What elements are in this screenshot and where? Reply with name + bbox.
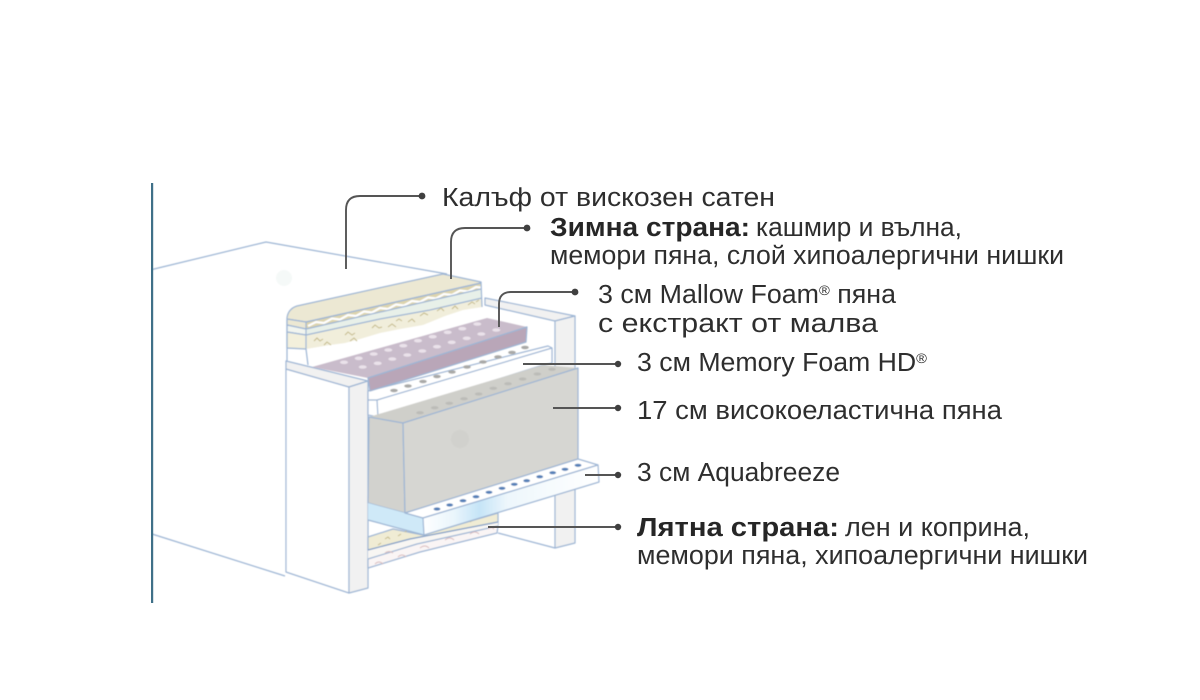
label: winter side: мемори пяна, слой хипоалергични нишки <box>550 242 1064 270</box>
mallow foam layer <box>312 318 527 391</box>
label: winter side: кашмир и вълна, <box>756 214 962 242</box>
label: mallow foam <box>598 281 897 338</box>
high-elastic foam perforations <box>416 368 556 414</box>
label: memory foam: ® <box>916 350 928 366</box>
label: mallow foam: пяна <box>830 281 897 309</box>
label: aquabreeze: 3 см Aquabreeze <box>637 459 840 487</box>
label: cover: Калъф от вискозен сатен <box>442 184 775 212</box>
label: summer side: мемори пяна, хипоалергични нишки <box>637 542 1088 570</box>
label: summer side <box>637 514 1088 570</box>
pointer: summer side <box>488 524 621 530</box>
label: summer side: Лятна страна: <box>637 514 839 542</box>
summer side layers <box>368 513 498 568</box>
pointer: high-elastic foam <box>553 405 621 411</box>
label: winter side: Зимна страна: <box>550 214 750 242</box>
pointer: memory foam <box>523 361 621 367</box>
vertical rule <box>151 183 153 603</box>
mattress cover outline <box>152 242 447 576</box>
mattress cross-section illustration <box>152 242 599 593</box>
label: high-elastic foam: 17 см високоеластична пяна <box>637 397 1003 425</box>
memory foam layer <box>368 346 552 417</box>
label: mallow foam: ® <box>819 282 831 298</box>
winter side layers <box>287 274 482 365</box>
memory foam perforations <box>390 346 529 392</box>
front cover strip and wall <box>286 361 368 593</box>
aquabreeze layer <box>368 459 599 535</box>
mallow foam perforations <box>340 322 500 369</box>
label: summer side: лен и коприна, <box>845 514 1030 542</box>
high-elastic foam block <box>368 365 578 513</box>
label: winter side <box>550 214 1064 270</box>
pointers and labels <box>346 184 1088 570</box>
pointer: winter side <box>451 225 530 279</box>
pointer: cover <box>346 193 425 269</box>
pointer: mallow foam <box>499 289 578 327</box>
label: memory foam: 3 см Memory Foam HD <box>637 349 904 377</box>
label: mallow foam: 3 см Mallow Foam <box>598 281 808 309</box>
pointer: aquabreeze <box>585 472 621 478</box>
aquabreeze perforations <box>434 464 581 511</box>
back frame pillar <box>485 298 575 548</box>
label: mallow foam: с екстракт от малва <box>598 310 879 338</box>
